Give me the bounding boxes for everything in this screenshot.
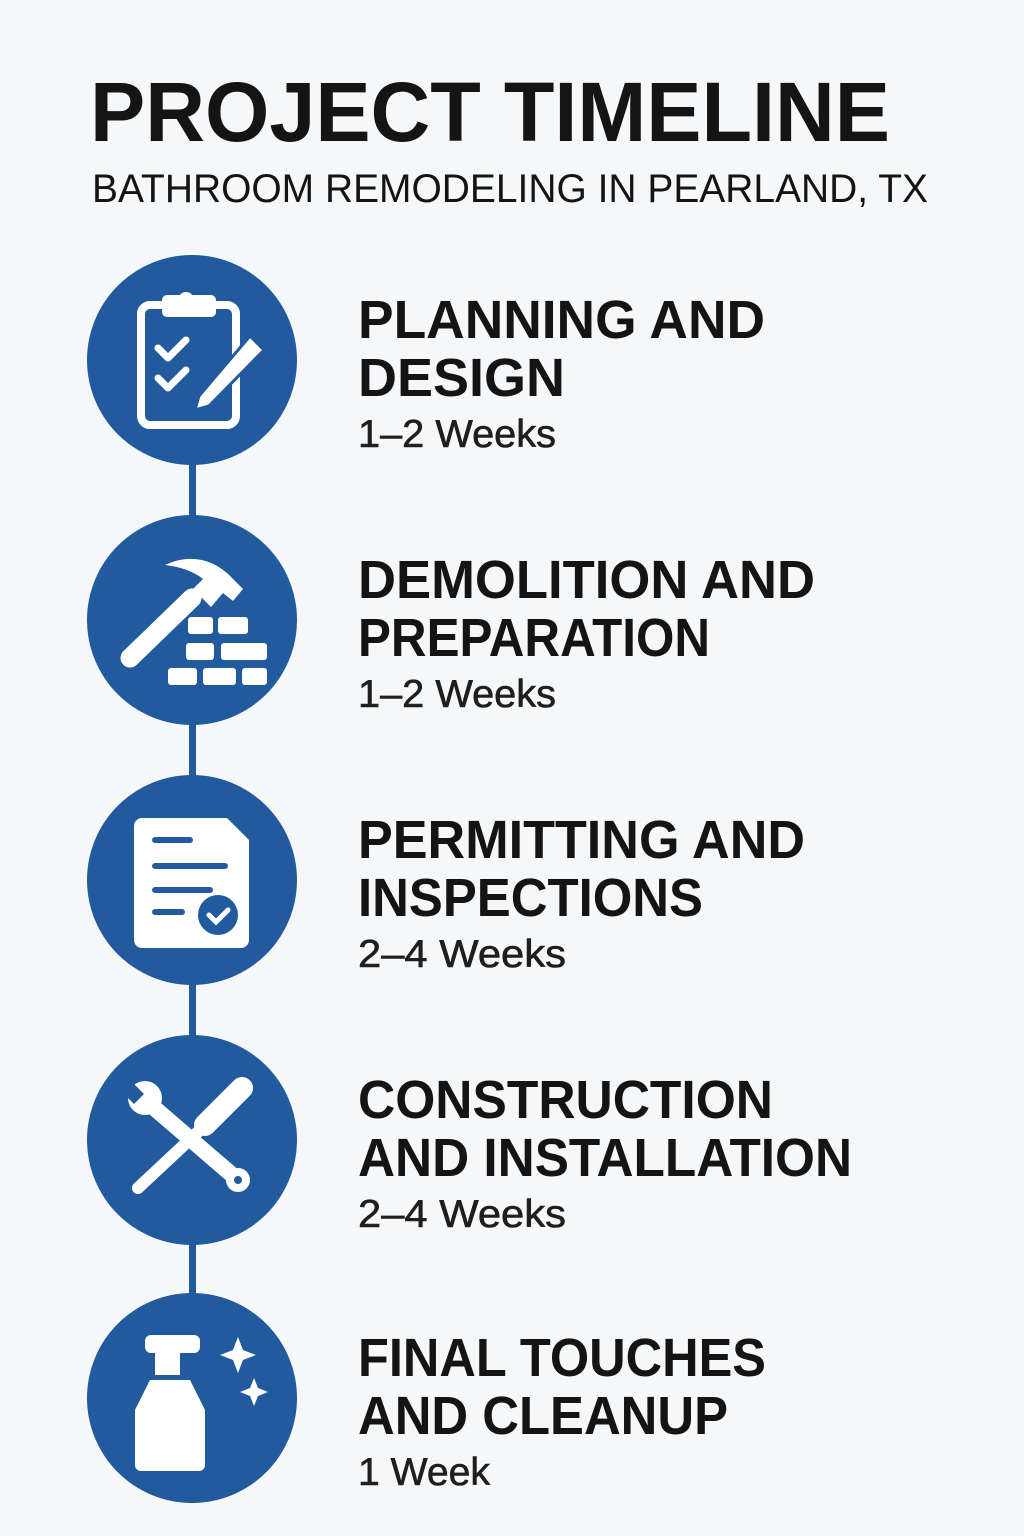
duration: 2–4 Weeks [358, 1193, 566, 1236]
step 2: demolition: PREPARATION [358, 608, 710, 668]
icon: clipboard [87, 255, 297, 465]
icon: document with check [87, 775, 297, 985]
step 1: planning and design: DESIGN [358, 348, 565, 408]
step 1: planning and design [87, 255, 765, 465]
title: PROJECT TIMELINE [90, 65, 890, 159]
icon: wrench and screwdriver [87, 1035, 297, 1245]
heading: DEMOLITION AND [358, 550, 815, 610]
icon: hammer and bricks [87, 515, 297, 725]
duration: 1 Week [358, 1451, 490, 1494]
step 5: final touches [87, 1293, 766, 1503]
step 4: construction [87, 1035, 852, 1245]
step 3: permitting [87, 775, 805, 985]
duration: 1–2 Weeks [358, 673, 556, 716]
step 5: final touches: AND CLEANUP [358, 1386, 728, 1446]
subtitle: BATHROOM REMODELING IN PEARLAND, TX [92, 167, 928, 211]
icon: spray bottle [87, 1293, 297, 1503]
duration: 2–4 Weeks [358, 933, 566, 976]
step 4: construction: AND INSTALLATION [358, 1128, 852, 1188]
timeline connector [189, 400, 196, 1400]
heading: CONSTRUCTION [358, 1070, 773, 1130]
heading: PERMITTING AND [358, 810, 805, 870]
heading: PLANNING AND [358, 290, 765, 350]
duration: 1–2 Weeks [358, 413, 556, 456]
heading: FINAL TOUCHES [358, 1328, 766, 1388]
step 3: permitting: INSPECTIONS [358, 868, 703, 928]
step 2: demolition [87, 515, 815, 725]
